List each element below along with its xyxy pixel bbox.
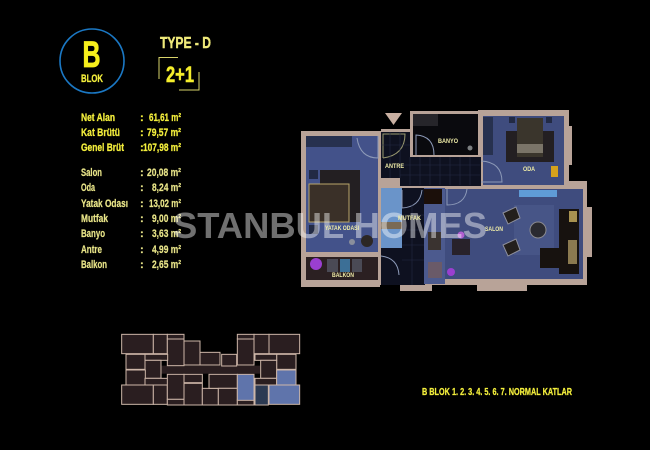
panel: bedroom — [306, 136, 378, 252]
building key plan — [122, 334, 300, 405]
area totals: Net Alan — [81, 112, 115, 124]
area totals: 79,57 m² — [147, 127, 181, 139]
plan walls — [301, 110, 592, 291]
room labels: ANTRE — [385, 164, 404, 170]
panel: hall — [381, 132, 481, 186]
room areas: 2,65 m² — [152, 259, 181, 271]
room areas: 13,02 m² — [149, 198, 181, 210]
room areas: : — [140, 244, 144, 256]
room areas: : — [140, 228, 144, 240]
room areas: Yatak Odası — [81, 198, 128, 210]
panel: bathroom — [413, 114, 478, 155]
area totals: : — [140, 112, 144, 124]
room labels: SALON — [485, 227, 503, 233]
area totals: : — [140, 142, 144, 154]
entrance marker — [385, 113, 402, 125]
panel: living room — [445, 189, 583, 279]
floor caption: B BLOK 1. 2. 3. 4. 5. 6. 7. NORMAL KATLAR — [422, 387, 573, 398]
block badge: BLOK — [81, 73, 103, 85]
room count badge — [159, 58, 199, 90]
area totals: Genel Brüt — [81, 142, 124, 154]
room areas: Salon — [81, 167, 102, 179]
block badge: B — [82, 34, 100, 75]
room labels: MUTFAK — [398, 216, 422, 222]
room areas: 8,24 m² — [152, 182, 181, 194]
room areas — [81, 167, 181, 271]
room areas: 20,08 m² — [147, 167, 181, 179]
area totals: Kat Brütü — [81, 127, 120, 139]
panel: second room — [481, 116, 564, 185]
room areas: Oda — [81, 182, 96, 194]
area totals — [81, 112, 181, 154]
watermark: STANBUL HOMES — [173, 205, 487, 246]
room areas: Antre — [81, 244, 102, 256]
room areas: : — [140, 259, 144, 271]
room areas: 3,63 m² — [152, 228, 181, 240]
room areas: : — [140, 213, 144, 225]
panel: balcony — [306, 257, 378, 280]
room areas: : — [140, 198, 144, 210]
room areas: Mutfak — [81, 213, 109, 225]
room areas: : — [140, 182, 144, 194]
type heading: TYPE - D — [160, 35, 211, 52]
panel: kitchen — [381, 188, 445, 285]
apartment floor plan — [173, 110, 592, 291]
room areas: 4,99 m² — [152, 244, 181, 256]
room areas: : — [140, 167, 144, 179]
room labels — [325, 139, 536, 279]
area totals: : — [140, 127, 144, 139]
room areas: Balkon — [81, 259, 107, 271]
block badge — [60, 29, 124, 93]
room labels: BANYO — [438, 139, 458, 145]
room areas: Banyo — [81, 228, 105, 240]
room labels: YATAK ODASI — [325, 226, 359, 232]
area totals: 107,98 m² — [143, 142, 181, 154]
area totals: 61,61 m² — [149, 112, 181, 124]
room areas: 9,00 m² — [152, 213, 181, 225]
room labels: BALKON — [332, 273, 354, 279]
room count badge: 2+1 — [166, 62, 194, 87]
room labels: ODA — [523, 167, 536, 173]
